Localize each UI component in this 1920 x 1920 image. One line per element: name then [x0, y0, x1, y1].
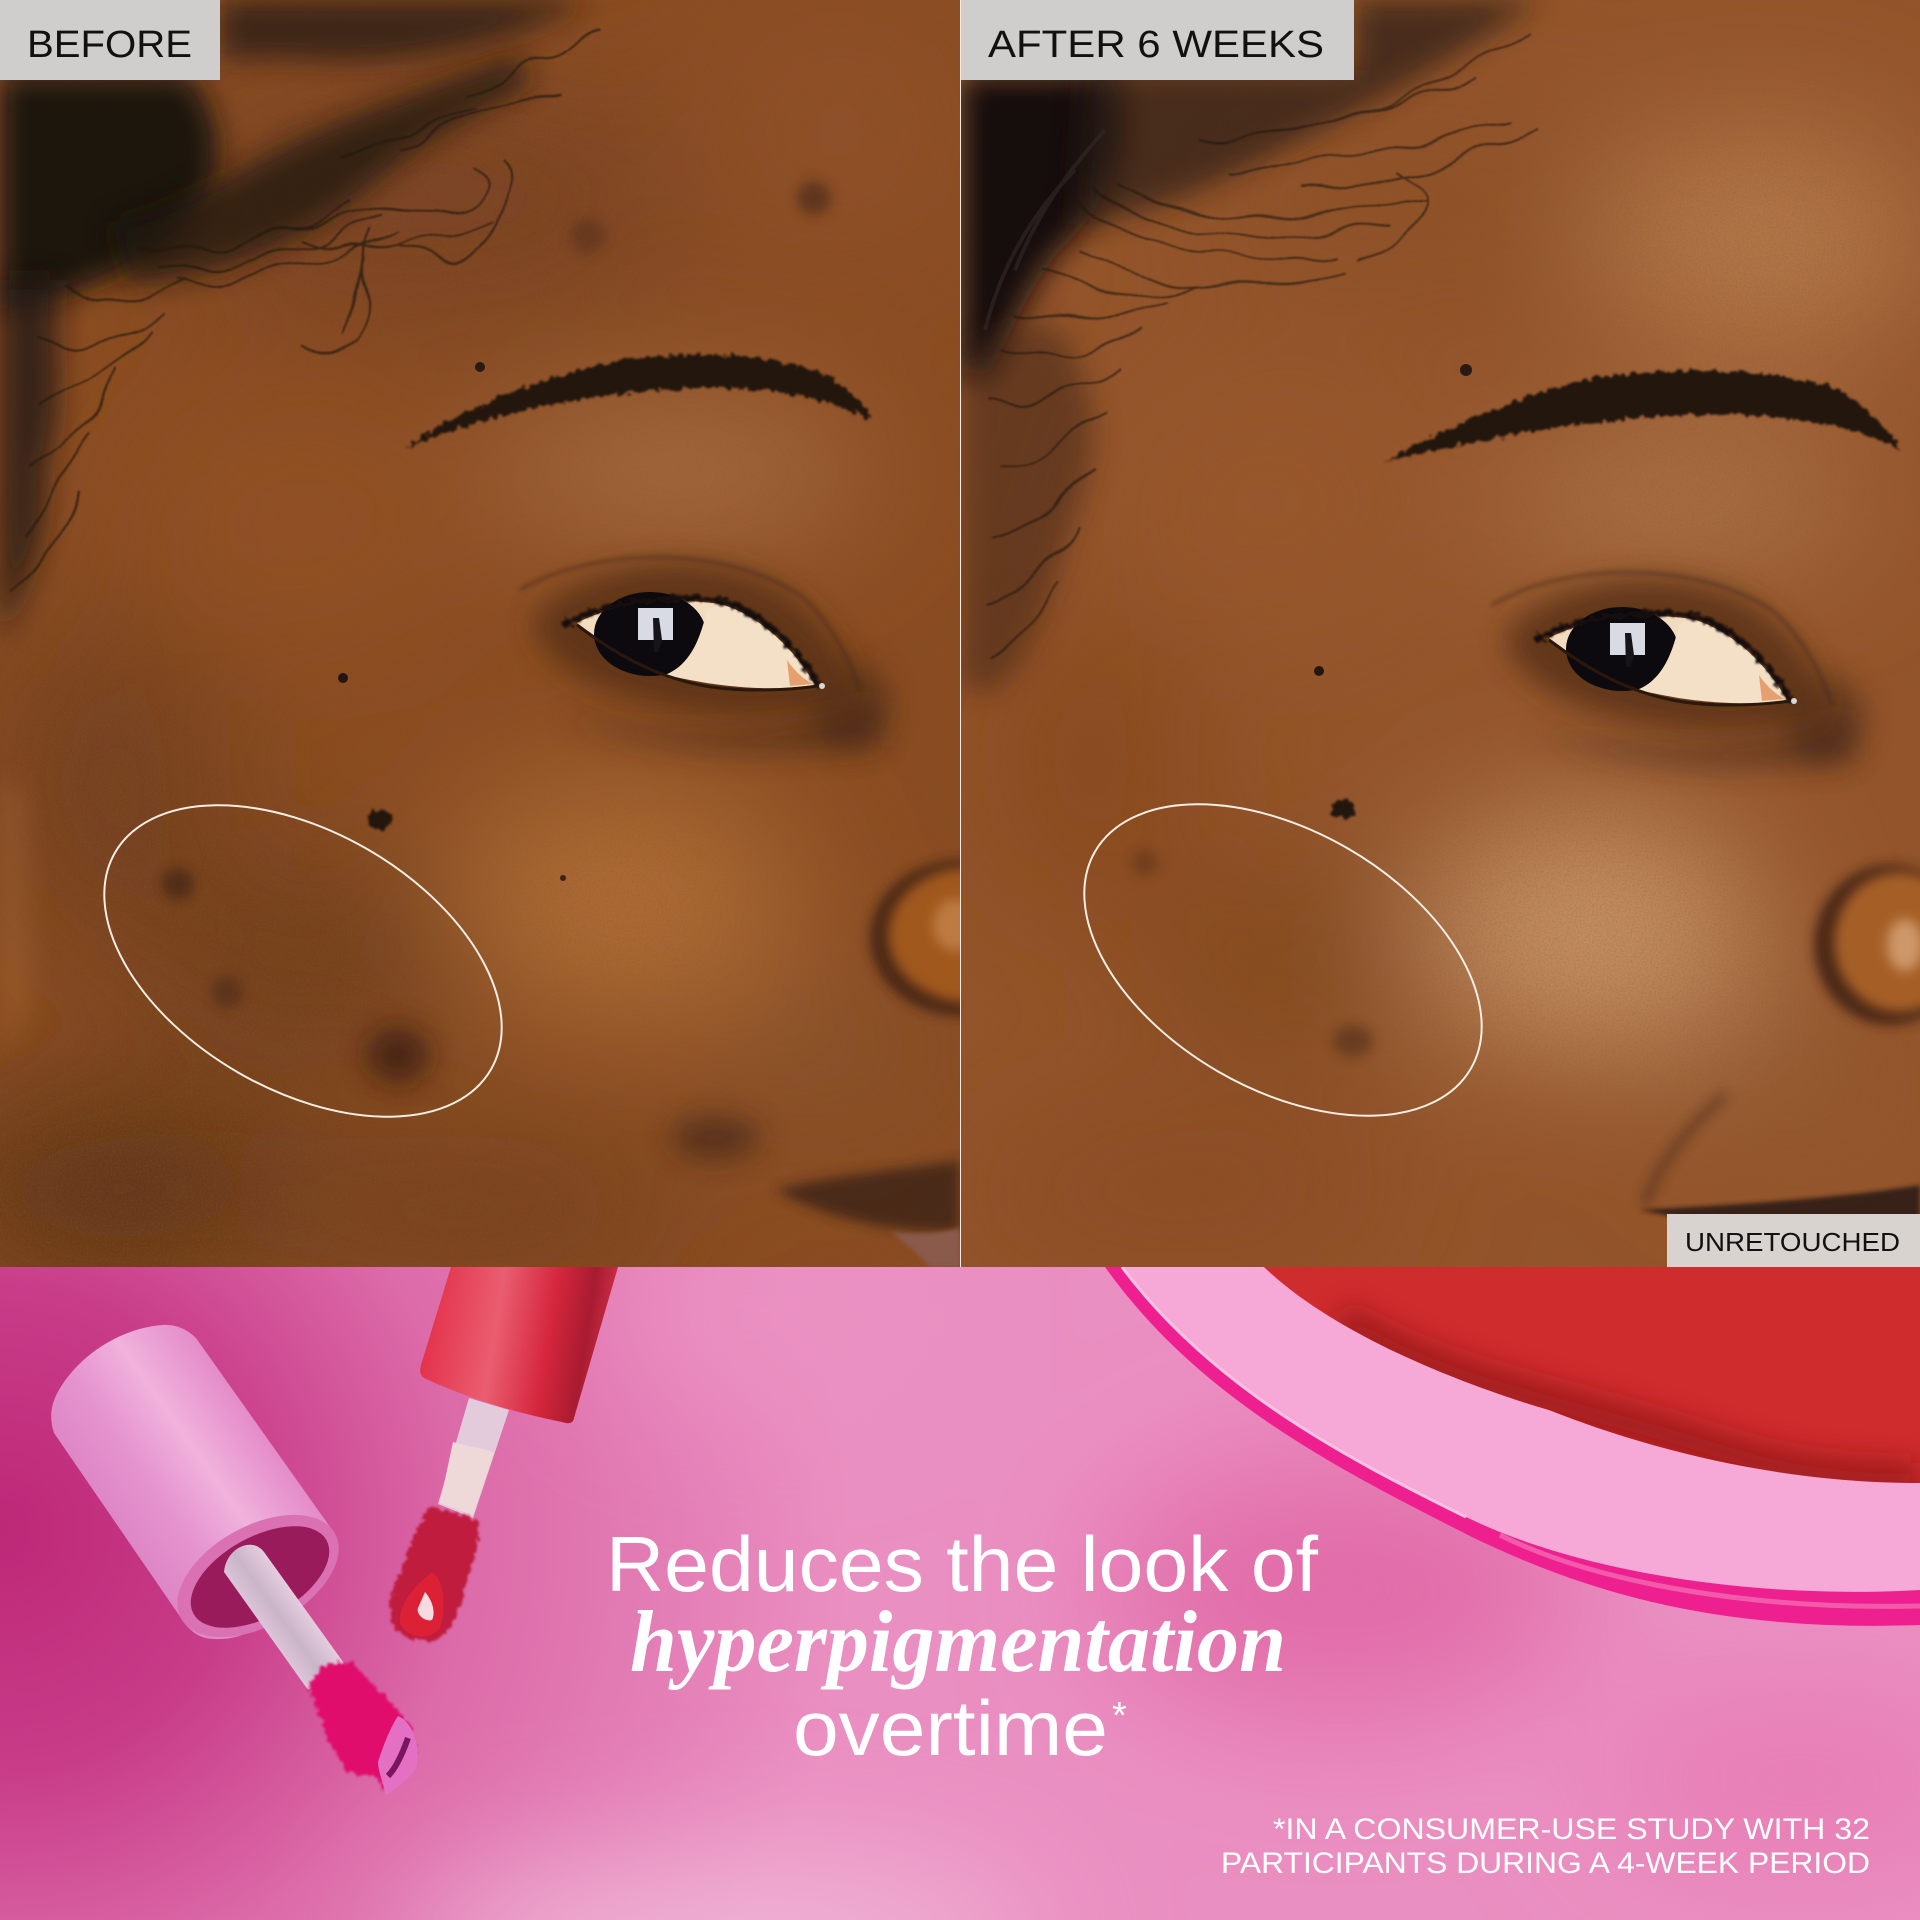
- headline: Reduces the look of: [606, 1520, 1318, 1608]
- right lips and crease: [1640, 1095, 1920, 1226]
- left lips: [670, 1116, 960, 1267]
- red cap wand: [391, 1267, 618, 1641]
- product swatch blob: [1105, 1267, 1920, 1626]
- footnote: *IN A CONSUMER-USE STUDY WITH 32: [1273, 1813, 1870, 1846]
- right nose: [1814, 865, 1920, 1025]
- headline: [606, 1520, 1318, 1772]
- label: before: BEFORE: [27, 24, 192, 66]
- left hair: [0, 0, 600, 640]
- headline: overtime: [793, 1684, 1108, 1772]
- footnote: [1221, 1813, 1870, 1880]
- panel: pink product area: [0, 1250, 1920, 1920]
- left moles and spots: [162, 181, 831, 1083]
- label: before: [0, 0, 220, 80]
- left ear edge: [0, 780, 28, 1060]
- right oval highlight: [1031, 740, 1535, 1180]
- label: unretouched: [1667, 1214, 1920, 1267]
- pink gradient background: [0, 1250, 1920, 1920]
- left oval highlight: [51, 741, 555, 1181]
- left eyebrow: [405, 355, 872, 448]
- right hair: [961, 0, 1540, 690]
- panel: before photo: [0, 0, 960, 1267]
- headline: *: [1112, 1695, 1127, 1737]
- panel: after photo: [960, 0, 1920, 1270]
- right eye: [1492, 572, 1852, 768]
- right moles and spots: [1132, 364, 1472, 1057]
- label: after 6 weeks: AFTER 6 WEEKS: [988, 24, 1324, 66]
- left under-eye shadow: [810, 660, 890, 750]
- pink cap wand: [51, 1325, 418, 1795]
- label: after 6 weeks: [961, 0, 1354, 80]
- label: unretouched: UNRETOUCHED: [1685, 1227, 1900, 1257]
- right under-eye shadow: [1785, 675, 1865, 765]
- headline: hyperpigmentation: [630, 1594, 1286, 1691]
- left eye: [520, 557, 880, 753]
- left nose: [870, 860, 1056, 1016]
- footnote: PARTICIPANTS DURING A 4-WEEK PERIOD: [1221, 1847, 1870, 1880]
- right eyebrow: [1385, 370, 1900, 462]
